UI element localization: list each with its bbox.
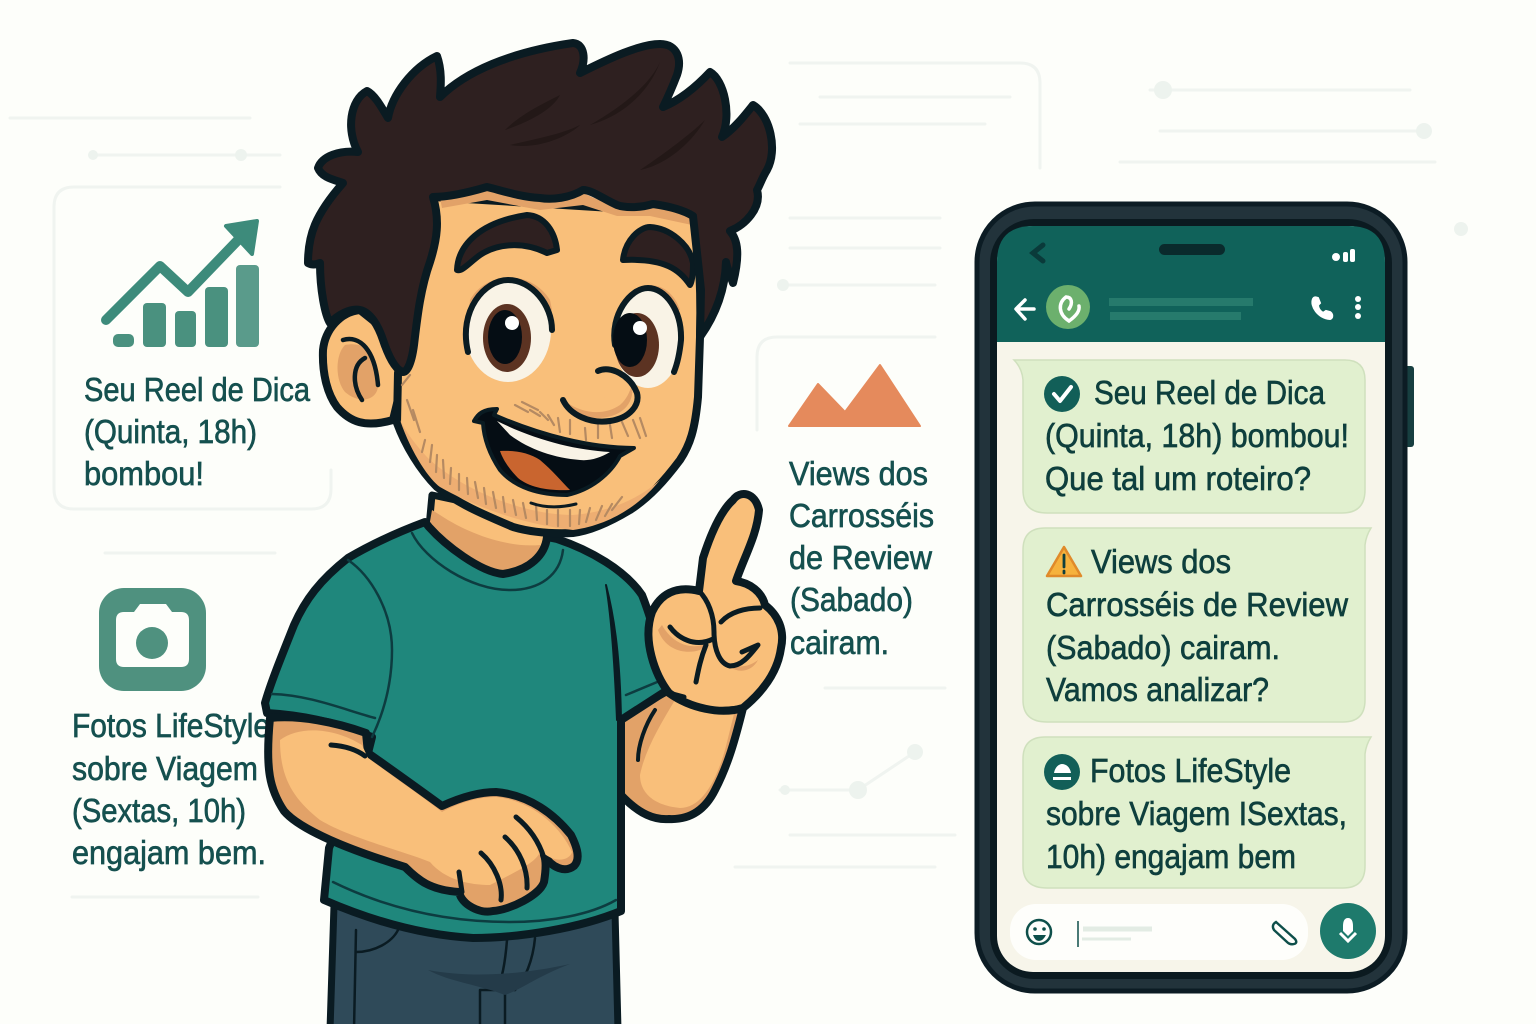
message input xyxy=(1010,904,1308,960)
message 1: (Quinta, 18h) bombou! xyxy=(1045,417,1349,454)
neck xyxy=(429,495,550,580)
side button xyxy=(1404,366,1414,447)
text: Views dos Carrosseis: Carrosséis xyxy=(789,497,934,534)
message 2: Views dos xyxy=(1091,543,1231,580)
text: Seu Reel de Dica xyxy=(84,371,311,492)
message 3 xyxy=(1023,737,1371,888)
mouth xyxy=(474,409,634,507)
screen xyxy=(997,226,1385,972)
message 1: Que tal um roteiro? xyxy=(1045,460,1311,497)
message 2: (Sabado) cairam. xyxy=(1046,629,1280,666)
message 1 xyxy=(1014,360,1365,513)
text: Fotos LifeStyle: Fotos LifeStyle xyxy=(72,707,270,744)
head xyxy=(308,43,772,533)
icon: falling peaks xyxy=(789,365,920,426)
message 3: sobre Viagem ISextas, xyxy=(1046,795,1347,832)
text: Seu Reel de Dica: (Quinta, 18h) xyxy=(84,413,257,450)
jeans xyxy=(330,905,618,1024)
text: Fotos LifeStyle xyxy=(72,707,270,871)
text: Views dos Carrosseis: de Review xyxy=(789,539,932,576)
message 2: Carrosséis de Review xyxy=(1046,586,1348,623)
text: Views dos Carrosseis: Views dos xyxy=(789,455,928,492)
left eye xyxy=(465,277,552,382)
eyebrows xyxy=(457,215,557,270)
right arm xyxy=(621,690,743,819)
stubble xyxy=(402,375,646,526)
text: Seu Reel de Dica: bombou! xyxy=(84,455,204,492)
icon: camera xyxy=(99,588,206,691)
character xyxy=(265,43,782,1024)
ear xyxy=(323,310,410,424)
phone xyxy=(977,204,1414,991)
nose xyxy=(563,369,638,422)
text: Fotos LifeStyle: (Sextas, 10h) xyxy=(72,792,246,829)
hair xyxy=(308,43,772,372)
message 3: Fotos LifeStyle xyxy=(1090,752,1291,789)
right eye xyxy=(613,285,682,388)
text: Views dos Carrosseis: cairam. xyxy=(790,624,889,661)
teal t-shirt xyxy=(265,522,669,938)
text: Seu Reel de Dica: Seu Reel de Dica xyxy=(84,371,311,408)
text: Fotos LifeStyle: sobre Viagem xyxy=(72,750,258,787)
message 1: Seu Reel de Dica xyxy=(1094,374,1326,411)
text: Views dos Carrosseis: (Sabado) xyxy=(790,581,913,618)
mic button xyxy=(1320,903,1376,959)
left arm xyxy=(268,717,578,912)
icon: growth chart xyxy=(106,221,259,347)
text: Views dos Carrosseis xyxy=(789,455,934,661)
message 2 xyxy=(1023,528,1371,722)
pointing hand xyxy=(648,494,782,711)
text: Fotos LifeStyle: engajam bem. xyxy=(72,834,266,871)
phone frame xyxy=(977,204,1405,991)
message 3: 10h) engajam bem xyxy=(1046,838,1296,875)
message 2: Vamos analizar? xyxy=(1046,671,1269,708)
chat header xyxy=(997,226,1385,342)
